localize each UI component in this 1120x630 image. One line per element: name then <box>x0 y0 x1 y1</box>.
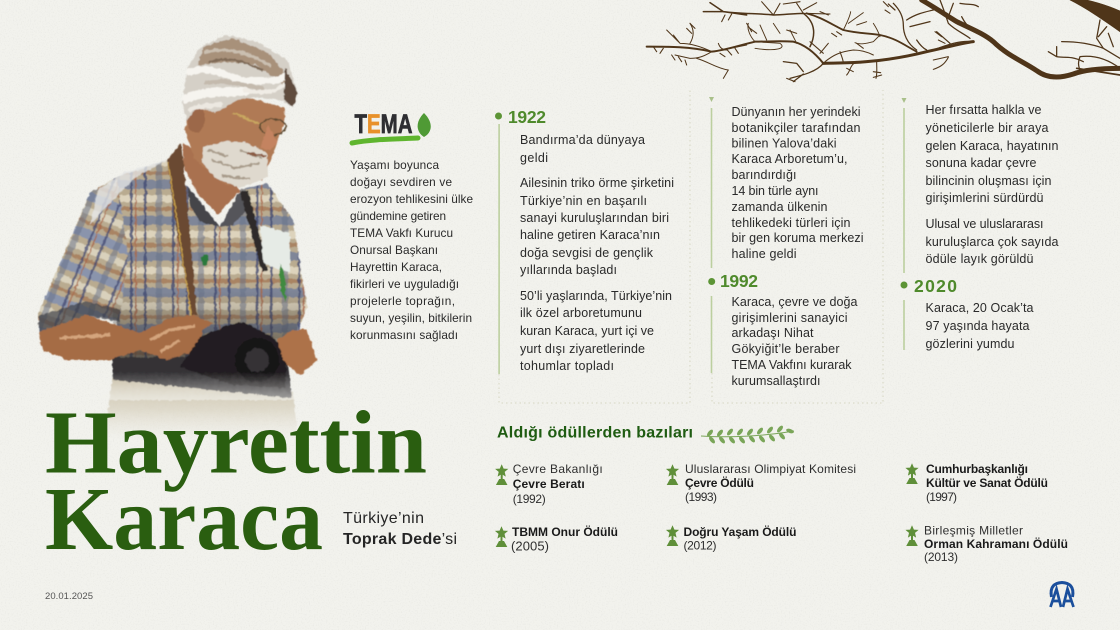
portrait: Hayrettin Karaca with camera <box>38 35 317 440</box>
icon: leaf garland <box>701 425 794 444</box>
text: introduction: Hayrettin Karaca, <box>350 260 442 274</box>
text before 1992: botanikçiler tarafından <box>732 121 861 135</box>
text 1922: doğa sevgisi de gençlik <box>520 246 654 260</box>
subtitle <box>343 510 457 548</box>
text before 2020: kuruluşlarca çok sayıda <box>926 235 1059 249</box>
waist shadow <box>112 355 292 398</box>
text: introduction: fikirleri ve uyguladığı <box>350 277 459 291</box>
nose <box>260 125 278 150</box>
timeline frames <box>499 88 883 403</box>
marker 1992 <box>708 97 715 373</box>
award: Çevre Ödülü <box>666 462 856 504</box>
text before 2020: ödüle layık görüldü <box>926 252 1034 266</box>
text 1922 <box>520 133 674 373</box>
text before 2020: Her fırsatta halkla ve <box>926 103 1042 117</box>
award: Çevre Ödülü: Çevre Ödülü <box>685 475 754 490</box>
beard <box>202 141 268 188</box>
timeline: 2020 <box>900 98 1059 351</box>
ear <box>187 103 205 133</box>
text 1922: ilk özel arboretumunu <box>520 306 642 320</box>
text: introduction: Yaşamı boyunca <box>350 158 439 172</box>
text before 2020 <box>926 103 1059 266</box>
text: introduction: korunmasını sağladı <box>350 328 458 342</box>
green pen <box>280 263 286 302</box>
illustration: tree branch <box>647 0 1120 82</box>
text 1992: kurumsallaştırdı <box>732 374 820 388</box>
text before 1992: zamanda ülkenin <box>732 200 828 214</box>
trousers <box>104 378 298 440</box>
camera <box>180 322 287 388</box>
hair strands <box>186 50 285 110</box>
face <box>185 95 285 185</box>
text before 1992: bilinen Yalova’daki <box>732 136 836 150</box>
award: Çevre Beratı <box>495 462 603 506</box>
text 1922: yıllarında başladı <box>520 263 617 277</box>
text before 1992: Dünyanın her yerindeki <box>732 105 860 119</box>
text 2020 <box>926 301 1034 351</box>
timeline: 1992 <box>708 97 864 388</box>
award: Çevre Beratı: Çevre Beratı <box>513 477 585 491</box>
text 1922: 50’li yaşlarında, Türkiye’nin <box>520 289 672 303</box>
text before 2020: gelen Karaca, hayatının <box>926 139 1059 153</box>
text 2020: Karaca, 20 Ocak’ta <box>926 301 1034 315</box>
text before 2020: Ulusal ve uluslararası <box>926 217 1044 231</box>
subtitle: Toprak Dede’si <box>343 531 457 548</box>
text: introduction <box>350 158 473 342</box>
award: TBMM Onur Ödülü: (2005) <box>511 538 549 554</box>
mouth <box>247 153 266 156</box>
award: Orman Kahramanı Ödülü: Orman Kahramanı Ödülü <box>924 536 1068 551</box>
shirt torso <box>113 160 307 360</box>
text before 1992: barındırdığı <box>732 168 796 182</box>
award: Orman Kahramanı Ödülü: Birleşmiş Milletler <box>924 524 1023 538</box>
text before 1992: tehlikedeki türleri için <box>732 216 851 230</box>
text: introduction: erozyon tehlikesini ülke <box>350 192 473 206</box>
text 1992: arkadaşı Nihat <box>732 326 814 340</box>
text 1992: Karaca, çevre ve doğa <box>732 295 858 309</box>
text before 2020: yöneticilerle bir araya <box>926 121 1049 135</box>
text: introduction: Onursal Başkanı <box>350 243 438 257</box>
text: introduction: projelerle toprağın, <box>350 294 455 308</box>
year 2020: 2020 <box>914 276 957 296</box>
text before 2020: sonuna kadar çevre <box>926 156 1037 170</box>
award: Çevre Beratı: (1992) <box>513 492 546 506</box>
award: TBMM Onur Ödülü: TBMM Onur Ödülü <box>512 524 618 539</box>
award: Çevre Beratı: Çevre Bakanlığı <box>513 462 603 476</box>
text 1922: Bandırma’da dünyaya <box>520 133 645 147</box>
text before 1992: bir gen koruma merkezi <box>732 231 864 245</box>
text before 1992: 14 bin türle aynı <box>732 184 818 198</box>
text 1922: yurt dışı ziyaretlerinde <box>520 342 645 356</box>
shoulder highlight <box>90 160 167 225</box>
text 1922: kuran Karaca, yurt içi ve <box>520 324 654 338</box>
text 1992 <box>732 295 858 388</box>
award: Orman Kahramanı Ödülü <box>905 524 1068 564</box>
camera strap right <box>240 190 268 272</box>
camera strap left <box>167 143 197 315</box>
text 1992: TEMA Vakfını kurarak <box>732 358 852 372</box>
text: introduction: TEMA Vakfı Kurucu <box>350 226 453 240</box>
shirt shade <box>113 290 307 360</box>
award: Kültür ve Sanat Ödülü: (1997) <box>926 490 957 504</box>
date: 20.01.2025 <box>45 591 93 602</box>
text 1922: sanayi kuruluşlarından biri <box>520 211 669 225</box>
neck <box>183 143 240 215</box>
award: Çevre Ödülü: (1993) <box>685 490 717 504</box>
pocket paper <box>260 225 290 272</box>
title: name: Hayrettin <box>45 394 427 492</box>
text before 2020: bilincinin oluşması için <box>926 174 1052 188</box>
glasses <box>233 113 286 135</box>
marker 2020 <box>900 98 908 350</box>
text: introduction: gündemine getiren <box>350 209 446 223</box>
text 1992: girişimlerini sanayici <box>732 311 848 325</box>
text 2020: gözlerini yumdu <box>926 337 1015 351</box>
award: Orman Kahramanı Ödülü: (2013) <box>924 550 958 564</box>
text before 2020: girişimlerini sürdürdü <box>926 191 1044 205</box>
award: Kültür ve Sanat Ödülü <box>905 462 1048 504</box>
marker 1922 <box>495 112 502 374</box>
text 1922: Türkiye’nin en başarılı <box>520 194 647 208</box>
lower fade <box>100 372 305 400</box>
text 1922: haline getiren Karaca’nın <box>520 228 660 242</box>
green pin <box>202 254 208 266</box>
shirt sleeve <box>38 177 128 332</box>
title: name: Karaca <box>45 470 323 569</box>
award: Çevre Ödülü: Uluslararası Olimpiyat Komitesi <box>685 462 856 476</box>
heading: awards: Aldığı ödüllerden bazıları <box>497 424 693 442</box>
award: Kültür ve Sanat Ödülü: Kültür ve Sanat Ödülü <box>926 475 1048 490</box>
text 2020: 97 yaşında hayata <box>926 319 1030 333</box>
subtitle: Türkiye’nin <box>343 510 424 527</box>
collar <box>187 187 220 227</box>
forearm <box>39 315 213 360</box>
right hand <box>277 330 317 376</box>
text: introduction: doğayı sevdiren ve <box>350 175 452 189</box>
award: Kültür ve Sanat Ödülü: Cumhurbaşkanlığı <box>926 462 1028 476</box>
text 1922: geldi <box>520 151 548 165</box>
year 1992: 1992 <box>720 271 758 291</box>
title: name <box>45 394 427 569</box>
text before 1992 <box>732 105 864 261</box>
text 1992: Gökyiğit’le beraber <box>732 342 840 356</box>
award: Doğru Yaşam Ödülü: (2012) <box>684 538 716 552</box>
text 1922: tohumlar topladı <box>520 359 614 373</box>
award: TBMM Onur Ödülü <box>495 524 618 554</box>
text: introduction: suyun, yeşilin, bitkilerin <box>350 311 472 325</box>
hair <box>182 35 298 120</box>
logo: TEMA: TEMA <box>354 109 412 139</box>
award: Doğru Yaşam Ödülü <box>666 524 796 552</box>
year 1922: 1922 <box>508 107 546 127</box>
text 1922: Ailesinin triko örme şirketini <box>520 176 674 190</box>
text before 1992: Karaca Arboretum’u, <box>732 152 848 166</box>
logo: AA <box>1050 582 1074 607</box>
text before 1992: haline geldi <box>732 247 796 261</box>
timeline: 1922 <box>495 107 674 374</box>
cuff shadow <box>39 301 120 333</box>
award: Doğru Yaşam Ödülü: Doğru Yaşam Ödülü <box>684 524 796 539</box>
